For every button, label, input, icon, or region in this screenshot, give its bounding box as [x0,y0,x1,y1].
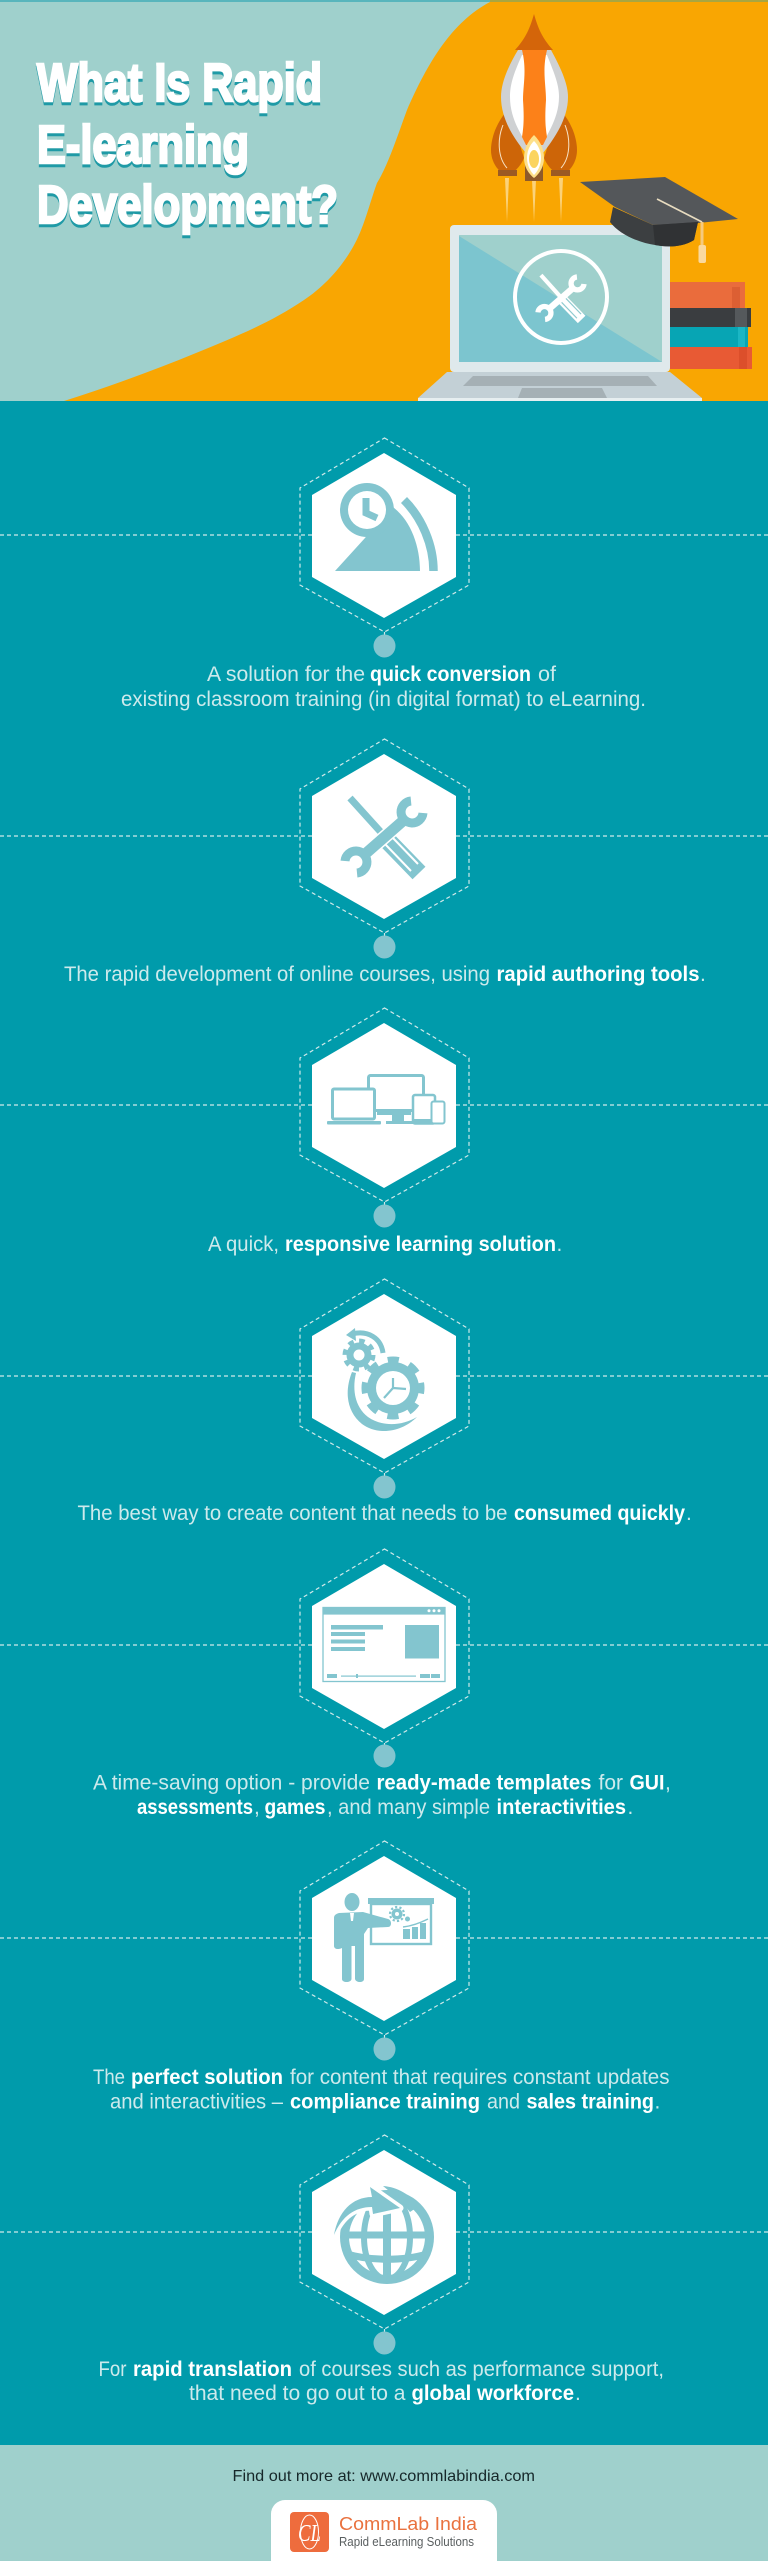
title: Development? [37,178,338,238]
orange curved background [64,2,768,401]
title: What Is Rapid [37,56,322,116]
text block 5: ready-made templates [376,1772,592,1794]
text block 5: , and many simple [327,1796,490,1819]
hexagon frame 4 [0,1279,768,1498]
panel: item 2 rapid authoring tools [0,739,768,986]
text block 6: and interactivities – [110,2091,283,2114]
panel: item 6 perfect solution [0,1841,768,2114]
icon: stack of books [670,282,752,369]
icon: responsive devices [327,1076,444,1124]
text block 7: that need to go out to a [189,2382,406,2405]
text block 7: For [98,2358,127,2381]
text block 7: of courses such as performance support, [299,2358,664,2381]
hexagon frame 6 [0,1841,768,2060]
text block 1: existing classroom training (in digital format) to eLearning. [121,688,646,711]
panel: item 7 rapid translation [0,2135,768,2405]
title: Development? [37,175,338,235]
hexagon frame 7 [0,2135,768,2354]
hexagon frame 3 [0,1008,768,1228]
text block 5: A time-saving option - provide [93,1772,370,1794]
text block 2: The rapid development of online courses, using [64,963,490,986]
text block 5: , [254,1796,260,1819]
icon: globe with arrow [334,2186,434,2284]
icon: presenter at board [334,1893,434,1982]
text block 7 [98,2358,664,2405]
panel: item 1 quick conversion [0,438,768,711]
text block 1: quick conversion [370,663,531,686]
text block 2: rapid authoring tools [496,963,700,986]
footer link text: Find out more at: www.commlabindia.com [232,2468,535,2485]
icon: clock and hill [335,483,434,571]
panel: header [0,0,768,401]
text block 1 [121,663,646,711]
panel: item 4 consumed quickly [0,1279,768,1525]
text block 6: perfect solution [131,2066,283,2089]
text block 5: . [628,1796,633,1819]
text block 7: global workforce [412,2382,574,2405]
logo icon [290,2512,329,2552]
icon: rocket [491,14,577,222]
text block 5: interactivities [496,1796,626,1819]
title: E-learning [37,118,249,178]
panel: item 5 ready-made templates [0,1549,768,1819]
text block 2 [64,963,706,986]
text block 6: and [487,2091,520,2114]
text block 5: GUI [630,1772,664,1794]
text block 4: consumed quickly [514,1502,685,1525]
text block 3: responsive learning solution [285,1233,556,1256]
icon: laptop [418,225,702,401]
icon: template window [322,1607,445,1682]
hexagon frame 1 [0,438,768,658]
logo card [271,2500,497,2561]
text block 7: rapid translation [133,2358,292,2381]
hexagon frame 2 [0,739,768,958]
panel: item 3 responsive solution [0,1008,768,1256]
text block 6 [93,2066,670,2114]
text block 5: games [264,1796,326,1819]
icon: gears and clock [345,1328,421,1431]
text block 5: for [598,1772,623,1794]
text block 1: of [538,663,556,686]
text block 5: , [665,1772,671,1794]
text block 3: . [556,1233,562,1256]
text block 5 [93,1772,671,1819]
text block 6: sales training [526,2091,654,2114]
text block 4: . [686,1502,692,1525]
icon: graduation cap [580,177,738,263]
text block 7: . [575,2382,581,2405]
text block 2: . [700,963,706,986]
text block 5: assessments [137,1796,253,1819]
logo icon: CL [298,2521,321,2547]
text block 3: A quick, [208,1233,279,1256]
icon: wrench and screwdriver [345,798,423,873]
icon: tools on screen [538,275,584,319]
text block 6: for content that requires constant updates [290,2066,670,2089]
text block 6: . [654,2091,660,2114]
title: E-learning [37,115,249,175]
hexagon frame 5 [0,1549,768,1768]
panel: footer [0,2445,768,2561]
logo wordmark: CommLab India [339,2514,478,2534]
title: What Is Rapid [37,53,322,113]
text block 6: The [93,2066,125,2089]
text block 1: A solution for the [207,663,365,686]
text block 6: compliance training [290,2091,480,2114]
text block 4: The best way to create content that needs to be [78,1502,508,1525]
logo tagline: Rapid eLearning Solutions [339,2534,474,2549]
title [37,53,338,238]
